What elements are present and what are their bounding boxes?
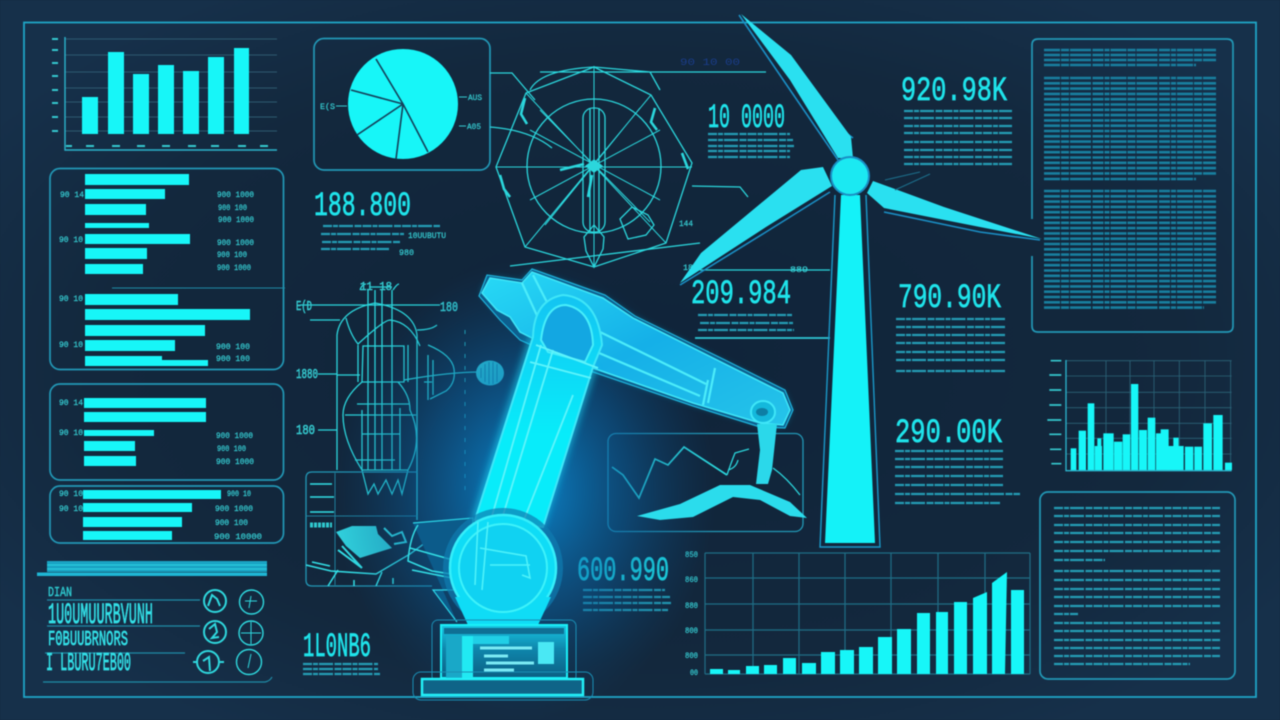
panel: horizontal bars 1: 900 100	[217, 251, 247, 260]
turbine hub	[831, 157, 869, 195]
turbine blades	[680, 14, 1042, 285]
metric: 290.00K: 290.00K	[895, 415, 1002, 453]
panel: small site map	[306, 472, 440, 586]
panel: horizontal bars 1: 900 1000	[217, 264, 251, 273]
label: blueprint callouts: E(D	[296, 299, 312, 315]
arm forearm	[479, 269, 793, 428]
panel: horizontal bars 1: 900 1000	[217, 191, 254, 200]
panel: pie chart: A05	[467, 123, 481, 132]
panel: pie chart	[314, 38, 490, 170]
panel: lower-left list with gauges	[37, 561, 272, 682]
panel: horizontal bars 1: 90 10	[59, 236, 83, 245]
chart: bottom growth columns: 00	[690, 669, 698, 678]
metric: 188.800: 10UUBUTU	[408, 232, 446, 241]
panel: horizontal bars 1: 90 14	[60, 191, 84, 200]
metric: 600.990: 600.990	[577, 553, 669, 591]
panel: horizontal bars 3: 900 10000	[214, 533, 262, 542]
chart: bottom growth columns: 800	[685, 652, 698, 661]
label: rotor callouts	[679, 58, 808, 275]
panel: horizontal bars 2: 900 1000	[216, 432, 253, 441]
metric: 790.90K: 790.90K	[898, 280, 1001, 318]
chart: bottom growth columns: 850	[685, 551, 698, 560]
metric: 209.984	[691, 276, 830, 338]
metric: 10 0000: 10 0000	[708, 100, 785, 138]
panel: pie chart: AUS	[468, 94, 482, 103]
chart: top-left column chart	[52, 37, 277, 150]
metric: 290.00K	[895, 415, 1020, 503]
metric: 920.98K: 920.98K	[901, 73, 1007, 111]
label: blueprint callouts: 1880	[296, 367, 318, 383]
chart: bottom growth columns: 880	[685, 602, 698, 611]
label: blueprint callouts: 11 18	[360, 280, 392, 294]
label: blueprint callouts: 180	[296, 423, 315, 439]
panel: horizontal bars 1: 90 10	[59, 295, 83, 304]
panel: bottom-right text block	[1040, 492, 1235, 679]
panel: horizontal bars 3: 900 1000	[215, 505, 253, 514]
panel: horizontal bars 1: 900 100	[216, 343, 250, 352]
panel: horizontal bars 2: 90 10	[59, 429, 83, 438]
panel: horizontal bars 2: 900 1000	[216, 458, 254, 467]
panel: lower-left list with gauges: 1U0UMUURBVUNH	[48, 599, 153, 633]
illustration: robot arm	[335, 262, 807, 718]
illustration: wind turbine	[680, 14, 1042, 547]
panel: lower-left list with gauges: DIAN	[48, 585, 72, 601]
glow	[335, 262, 715, 718]
arm base platform	[413, 672, 593, 700]
metric: 188.800: 188.800	[314, 188, 411, 226]
panel: horizontal bars 3: 900 100	[215, 519, 248, 528]
panel: pie chart: E(S	[320, 103, 335, 112]
panel: line chart behind wrist	[608, 434, 803, 532]
label: rotor callouts: 90 10 00	[680, 58, 740, 69]
panel: horizontal bars 1: 900 1000	[218, 216, 254, 225]
metric: 920.98K	[901, 73, 1012, 164]
panel: lower-left list with gauges: I LBURU7EB00	[46, 648, 131, 678]
arm lower section	[472, 295, 602, 532]
panel: horizontal bars 3: 90 10	[59, 505, 83, 514]
metric: 209.984: 209.984	[691, 276, 791, 314]
panel: horizontal bars 3: 900 10	[227, 490, 251, 499]
panel: horizontal bars 3: 90 10	[59, 490, 83, 499]
arm base joint	[443, 508, 563, 628]
panel: horizontal bars 2	[50, 384, 284, 480]
arm side joint	[408, 518, 473, 622]
metric: 1L0NB6	[303, 629, 380, 674]
label: rotor callouts: 18	[683, 264, 693, 273]
label: rotor callouts: 144	[679, 220, 693, 229]
panel: horizontal bars 2: 900 100	[217, 445, 246, 454]
metric: 1L0NB6: 1L0NB6	[303, 629, 371, 667]
chart: bottom growth columns: 800	[685, 627, 698, 636]
label: rotor callouts: 889	[790, 266, 808, 275]
panel: horizontal bars 1: 900 100	[216, 355, 250, 364]
panel: horizontal bars 1: 90 10	[59, 341, 83, 350]
metric: 10 0000	[708, 100, 794, 157]
turbine tower	[820, 195, 880, 547]
panel: horizontal bars 2: 90 14	[59, 399, 83, 408]
diagram: rotor blueprint	[490, 66, 830, 270]
metric: 790.90K	[896, 280, 1005, 371]
metric: 188.800	[314, 188, 446, 258]
metric: 188.800: 980	[399, 249, 414, 258]
icon: scribbled node	[476, 360, 504, 386]
arm base housing	[432, 620, 576, 682]
label: blueprint callouts: 180	[440, 300, 458, 316]
diagram: central mechanical blueprint	[300, 284, 480, 520]
chart: bottom growth columns	[685, 551, 1030, 678]
chart: right histogram	[1047, 360, 1232, 471]
panel: top-right text block	[1032, 39, 1233, 332]
panel: horizontal bars 1: 900 1000	[217, 239, 254, 248]
panel: horizontal bars 3	[50, 486, 284, 543]
metric: 600.990	[577, 553, 672, 610]
panel: horizontal bars 1: 900 100	[218, 204, 247, 213]
label: blueprint callouts	[296, 280, 458, 439]
chart: bottom growth columns: 860	[685, 576, 698, 585]
panel: horizontal bars 1	[50, 168, 285, 370]
panel: lower-left list with gauges: F0BUUBRNORS	[48, 629, 128, 652]
arm wrist and foot	[637, 424, 807, 520]
